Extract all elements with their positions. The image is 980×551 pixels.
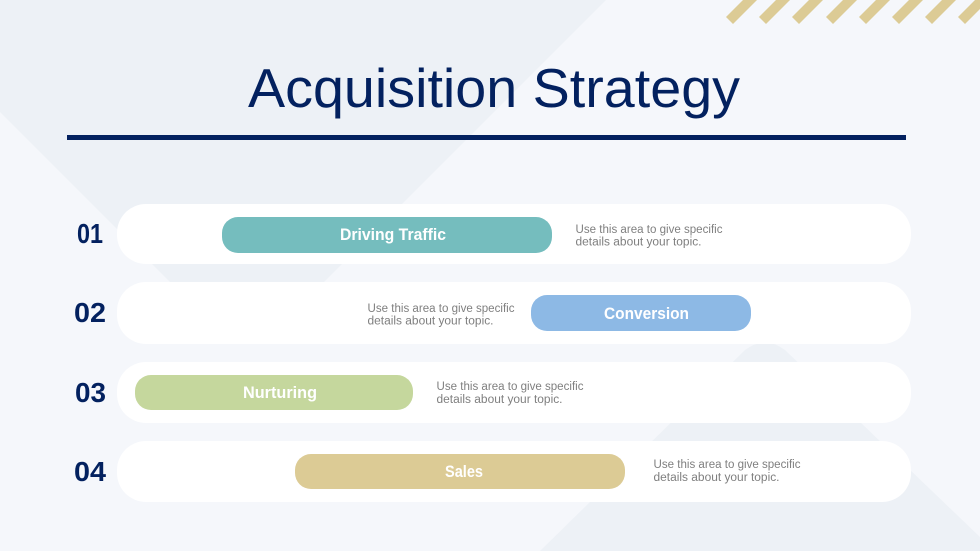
row 2 xyxy=(74,282,911,344)
row 1 description: details about your topic. xyxy=(576,236,702,248)
row 4 pill xyxy=(295,454,625,489)
row 2 description: Use this area to give specific xyxy=(368,303,515,315)
row 4 track xyxy=(117,441,911,502)
title: Acquisition Strategy xyxy=(248,57,740,119)
title rule xyxy=(67,135,906,140)
row 2 pill xyxy=(531,295,751,331)
row 1 track xyxy=(117,204,911,264)
row 1 description: Use this area to give specific xyxy=(576,224,723,236)
decorative stripes xyxy=(726,0,980,24)
row 3 track xyxy=(117,362,911,423)
row 4 description: details about your topic. xyxy=(654,472,780,484)
row 2 description: details about your topic. xyxy=(368,316,494,328)
row 1 pill xyxy=(222,217,552,253)
row 1 number: 01 xyxy=(77,218,103,249)
row 2 track xyxy=(117,282,911,344)
row 4 xyxy=(74,441,911,502)
row 4 number: 04 xyxy=(74,456,106,487)
row 4 label: Sales xyxy=(445,463,483,481)
row 2 label: Conversion xyxy=(604,305,689,323)
row 3 label: Nurturing xyxy=(243,384,317,402)
row 4 description: Use this area to give specific xyxy=(654,459,801,471)
row 1 label: Driving Traffic xyxy=(340,226,446,244)
background shape: top-left xyxy=(0,0,606,330)
row 2 number: 02 xyxy=(74,297,106,328)
row 3 description: details about your topic. xyxy=(436,394,562,406)
row 3 xyxy=(75,362,911,423)
row 3 description: Use this area to give specific xyxy=(436,381,584,393)
background shape: bottom-right xyxy=(540,342,980,551)
row 3 pill xyxy=(135,375,413,410)
row 1 xyxy=(77,204,911,264)
row 3 number: 03 xyxy=(75,377,106,408)
